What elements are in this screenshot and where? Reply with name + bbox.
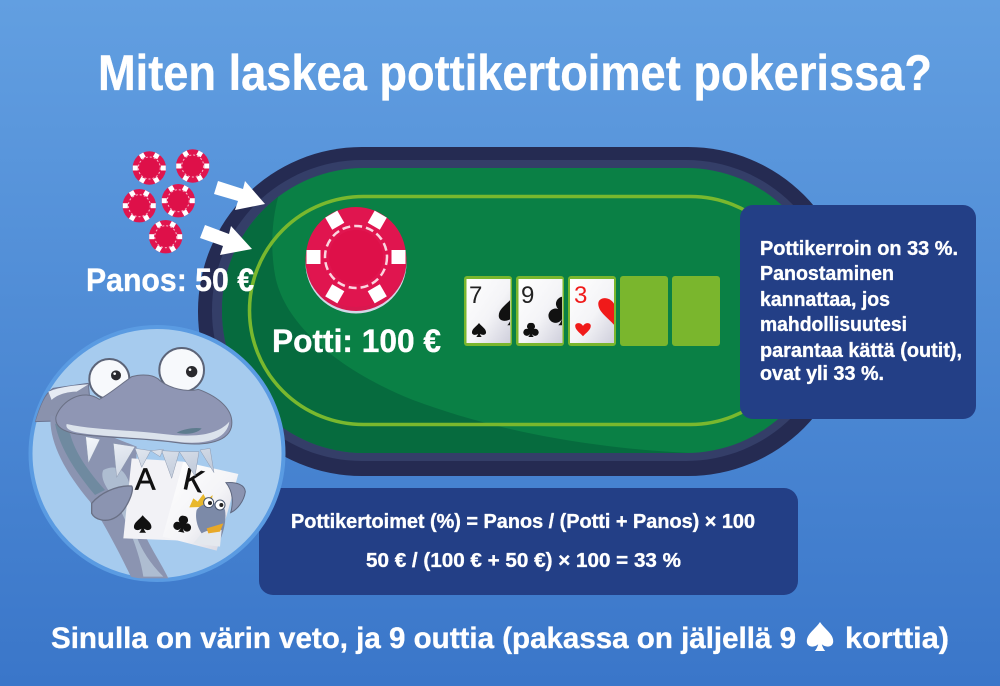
panel: pot odds explanation: mahdollisuutesi [760,314,907,336]
icon: spade [807,622,833,651]
arrow: upper chips to table [214,181,265,210]
table inner rim [212,160,836,461]
card slot 1: seven of spades [464,276,512,346]
right card [176,462,238,550]
panel: pot odds explanation: kannattaa, jos [760,289,890,311]
panel: formula: 50 € / (100 € + 50 €) × 100 = 33 % [366,550,681,572]
panel: pot odds explanation: ovat yli 33 %. [760,363,884,385]
shark right fin [226,482,245,513]
shark left fin [92,486,132,520]
shark mascot badge [30,327,284,580]
panel: formula [259,488,798,595]
shark right eye [159,348,204,392]
empty slot 4 [620,276,668,346]
card slot 3: three of hearts: 3 [574,282,587,309]
empty slot 5 [672,276,720,346]
ace letter: A [135,462,156,496]
card slot 2: nine of clubs [516,276,564,346]
arrow: lower chips to table [200,225,252,255]
board cards [464,276,720,346]
card slot 1: seven of spades: 7 [469,282,482,309]
pot chip stack [306,207,406,314]
spade pip [134,515,151,533]
bottom caption: Sinulla on värin veto, ja 9 outtia (pakassa on jäljellä 9 [51,622,796,655]
table felt [222,168,828,453]
title: Miten laskea pottikertoimet pokerissa? [98,45,932,101]
left card [123,458,183,541]
bottom caption: korttia) [845,622,949,655]
table line [250,196,804,424]
shark left eye [89,359,129,399]
panel: pot odds explanation: parantaa kättä (outit), [760,340,962,362]
card slot 2: nine of clubs: 9 [521,282,534,309]
panel: pot odds explanation [740,205,976,419]
stake label: Panos: 50 € [86,262,254,298]
panel: pot odds explanation: Panostaminen [760,263,894,285]
shark upper jaw [56,375,232,444]
pot label: Potti: 100 € [272,323,441,359]
table rim [198,147,852,476]
club pip [173,516,192,533]
panel: pot odds explanation: Pottikerroin on 33 %. [760,238,958,260]
felt shadow [222,197,686,453]
panel: formula: Pottikertoimet (%) = Panos / (Potti + Panos) × 100 [291,511,755,533]
shark teeth [86,437,214,478]
card slot 3: three of hearts [568,276,616,346]
mini shark with crown [189,494,225,547]
king letter: K [180,462,208,500]
shark fin [35,383,92,422]
stake chips [123,149,209,253]
shark body [50,415,168,578]
poker table [198,147,852,476]
